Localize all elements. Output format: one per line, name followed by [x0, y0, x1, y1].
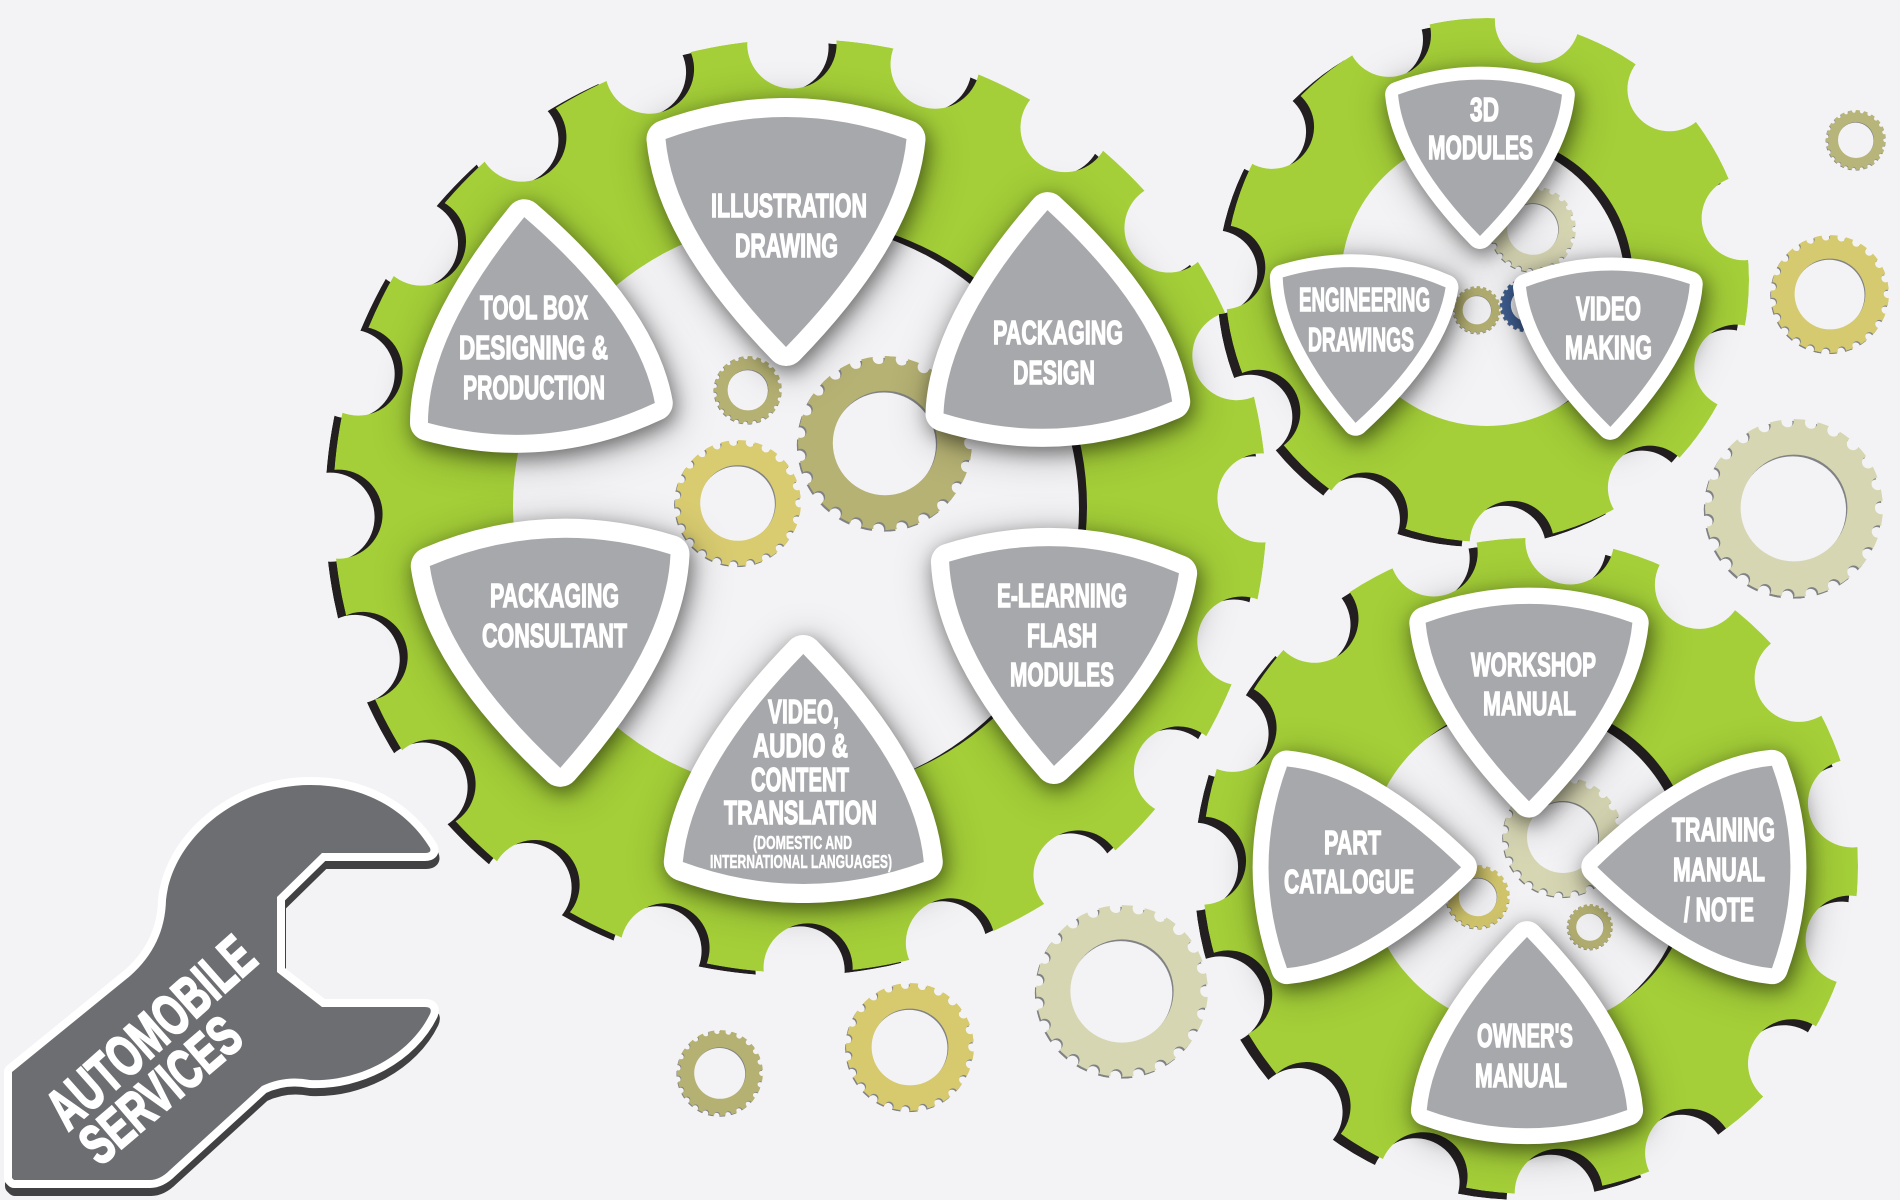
- label: engineering drawings: DRAWINGS: [1308, 321, 1414, 358]
- panel: part catalogue: [1269, 766, 1461, 968]
- label: packaging design: [993, 314, 1123, 391]
- main gear: [325, 39, 1267, 976]
- small gear: blue in top hub: [1500, 278, 1554, 333]
- label: video, audio and content translation: (DOMESTIC AND: [753, 833, 852, 853]
- panel: e-learning flash modules: [939, 541, 1180, 772]
- label: workshop manual: [1471, 646, 1596, 722]
- panel: illustration drawing: [666, 117, 906, 347]
- label: packaging design: PACKAGING: [993, 314, 1123, 351]
- bottom right gear: [1194, 538, 1858, 1200]
- label: illustration drawing: DRAWING: [735, 227, 838, 264]
- label: training manual / note: / NOTE: [1684, 891, 1754, 928]
- label: engineering drawings: [1299, 281, 1430, 358]
- label: e-learning flash modules: FLASH: [1027, 617, 1097, 654]
- panel: packaging consultant: [429, 532, 681, 774]
- panel: packaging design: [933, 204, 1173, 434]
- small gear: olive in main hub: [713, 356, 782, 425]
- wrench label: AUTOMOBILE: [34, 923, 268, 1142]
- label: 3d modules: MODULES: [1428, 129, 1533, 166]
- label: e-learning flash modules: [997, 577, 1127, 693]
- small gear: yellow in main hub: [674, 440, 801, 567]
- label: part catalogue: [1284, 824, 1414, 900]
- label: video making: VIDEO: [1576, 290, 1641, 327]
- label: tool box designing and production: PRODUCTION: [463, 369, 605, 406]
- small gear: yellow in bottom hub: [1446, 865, 1510, 930]
- label: 3d modules: 3D: [1470, 91, 1499, 128]
- label: engineering drawings: ENGINEERING: [1299, 281, 1430, 318]
- label: tool box designing and production: TOOL BOX: [480, 289, 588, 326]
- small gear: yellow bottom: [845, 983, 974, 1112]
- label: packaging design: DESIGN: [1013, 354, 1095, 391]
- label: video, audio and content translation: TRANSLATION: [724, 794, 877, 831]
- label: training manual / note: MANUAL: [1673, 851, 1765, 888]
- panel: workshop manual: [1426, 604, 1632, 801]
- label: video, audio and content translation: CONTENT: [751, 761, 849, 798]
- label: video making: MAKING: [1565, 329, 1652, 366]
- wrench label: [34, 923, 268, 1176]
- top right gear: [1217, 18, 1749, 547]
- small gear: olive in bottom hub: [1567, 904, 1613, 950]
- label: 3d modules: [1428, 91, 1533, 166]
- wrench: automobile services: [12, 785, 432, 1188]
- label: video, audio and content translation: VIDEO,: [768, 693, 839, 730]
- small gear: olive top right: [1826, 110, 1886, 171]
- label: video, audio and content translation: INTERNATIONAL LANGUAGES): [710, 852, 892, 872]
- label: owner's manual: MANUAL: [1475, 1057, 1567, 1094]
- label: illustration drawing: ILLUSTRATION: [711, 187, 867, 224]
- label: owner's manual: OWNER'S: [1477, 1017, 1573, 1054]
- wrench label: SERVICES: [67, 1004, 254, 1176]
- small gear: pale in bottom hub: [1502, 777, 1623, 898]
- label: illustration drawing: [711, 187, 867, 264]
- label: training manual / note: [1672, 811, 1775, 928]
- label: owner's manual: [1475, 1017, 1573, 1094]
- label: video, audio and content translation: [710, 693, 892, 872]
- label: tool box designing and production: DESIGNING &: [459, 329, 608, 366]
- small gear: yellow right: [1770, 235, 1889, 354]
- panel: video, audio and content translation: [683, 654, 924, 884]
- small gear: large olive in main hub: [797, 356, 972, 532]
- panel: owner's manual: [1427, 937, 1627, 1128]
- small gear: olive in top hub: [1453, 286, 1501, 334]
- label: video, audio and content translation: AUDIO &: [753, 727, 848, 764]
- panel: training manual / note: [1597, 766, 1790, 968]
- label: e-learning flash modules: MODULES: [1010, 656, 1114, 693]
- label: e-learning flash modules: E-LEARNING: [997, 577, 1127, 614]
- label: part catalogue: CATALOGUE: [1284, 863, 1414, 900]
- small gear: olive bottom: [676, 1030, 763, 1117]
- label: packaging consultant: CONSULTANT: [482, 617, 627, 654]
- small gear: pale right: [1704, 419, 1883, 599]
- label: packaging consultant: [482, 577, 627, 654]
- label: workshop manual: WORKSHOP: [1471, 646, 1596, 683]
- panel: 3d modules: [1398, 80, 1562, 236]
- label: training manual / note: TRAINING: [1672, 811, 1775, 848]
- small gear: pale in top hub: [1489, 186, 1576, 273]
- label: video making: [1565, 290, 1652, 366]
- panel: engineering drawings: [1274, 263, 1446, 428]
- label: workshop manual: MANUAL: [1483, 685, 1576, 722]
- label: packaging consultant: PACKAGING: [490, 577, 619, 614]
- panel: tool box designing and production: [411, 207, 657, 444]
- label: part catalogue: PART: [1324, 824, 1381, 861]
- label: tool box designing and production: [459, 289, 608, 406]
- small gear: pale bottom: [1035, 905, 1208, 1079]
- panel: video making: [1526, 269, 1692, 428]
